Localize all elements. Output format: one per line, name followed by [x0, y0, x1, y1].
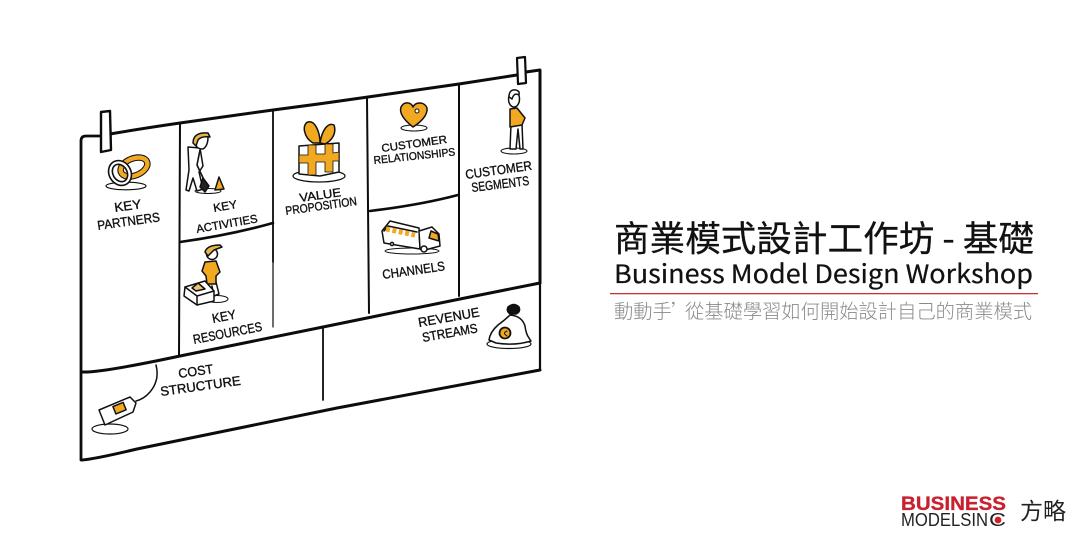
title: workshop name in English: Business Model Design Workshop [614, 254, 1033, 291]
icon: channels truck [382, 221, 440, 254]
label: value proposition: PROPOSITION [284, 194, 358, 218]
label: value proposition: VALUE [298, 185, 342, 205]
logo: Chinese brand name: 方略 [1020, 492, 1066, 526]
subtitle: ’ [671, 296, 690, 324]
label: channels: CHANNELS [381, 258, 446, 282]
label: revenue streams: STREAMS [421, 320, 479, 345]
logo: Business Models Inc [901, 493, 1006, 530]
label: customer relationships: RELATIONSHIPS [373, 146, 456, 167]
label: key resources: KEY [211, 307, 237, 326]
label: revenue streams [417, 304, 481, 345]
label: key activities: ACTIVITIES [195, 213, 259, 236]
logo: Business Models Inc: C [989, 510, 1006, 530]
label: key resources: RESOURCES [192, 319, 264, 347]
label: cost structure: STRUCTURE [159, 373, 242, 399]
label: key partners: KEY [113, 196, 142, 215]
label: customer relationships [373, 134, 456, 167]
icon: right clothes pin [517, 57, 526, 84]
logo: Business Models Inc: MODELSIN [901, 510, 988, 530]
label: key resources [192, 307, 264, 347]
panel: business model canvas [81, 57, 540, 460]
icon: value proposition gift [293, 122, 345, 182]
canvas grid lines [81, 70, 540, 460]
icon: left clothes pin [101, 111, 111, 152]
icon: customer relationships heart [401, 103, 427, 131]
subtitle: 動動手 [614, 296, 672, 324]
label: key activities: KEY [212, 199, 238, 215]
label: key partners [96, 196, 161, 233]
icon: key activities digging person [186, 133, 224, 194]
label: customer segments [464, 158, 533, 195]
label: revenue streams: REVENUE [417, 304, 481, 330]
label: key activities [195, 199, 259, 236]
icon: key resources person with box [184, 245, 228, 305]
label: cost structure: COST [177, 361, 214, 381]
title: workshop name in Chinese: 商業模式設計工作坊 - 基礎 [614, 211, 1034, 262]
label: customer relationships: CUSTOMER [381, 134, 448, 155]
icon: customer standing person [501, 90, 527, 154]
logo: Business Models Inc: BUSINESS [901, 493, 1006, 515]
label: key partners: PARTNERS [96, 209, 161, 233]
icon: cost structure price tag [92, 365, 157, 434]
icon: revenue streams money bag [487, 304, 531, 348]
label: customer segments: SEGMENTS [471, 173, 530, 195]
subtitle: 從基礎學習如何開始設計自己的商業模式 [685, 296, 1032, 324]
icon: key partners rings [106, 154, 150, 190]
label: value proposition [284, 185, 358, 218]
label: customer segments: CUSTOMER [464, 158, 533, 182]
label: cost structure [159, 361, 242, 399]
divider: red rule [610, 293, 1038, 294]
